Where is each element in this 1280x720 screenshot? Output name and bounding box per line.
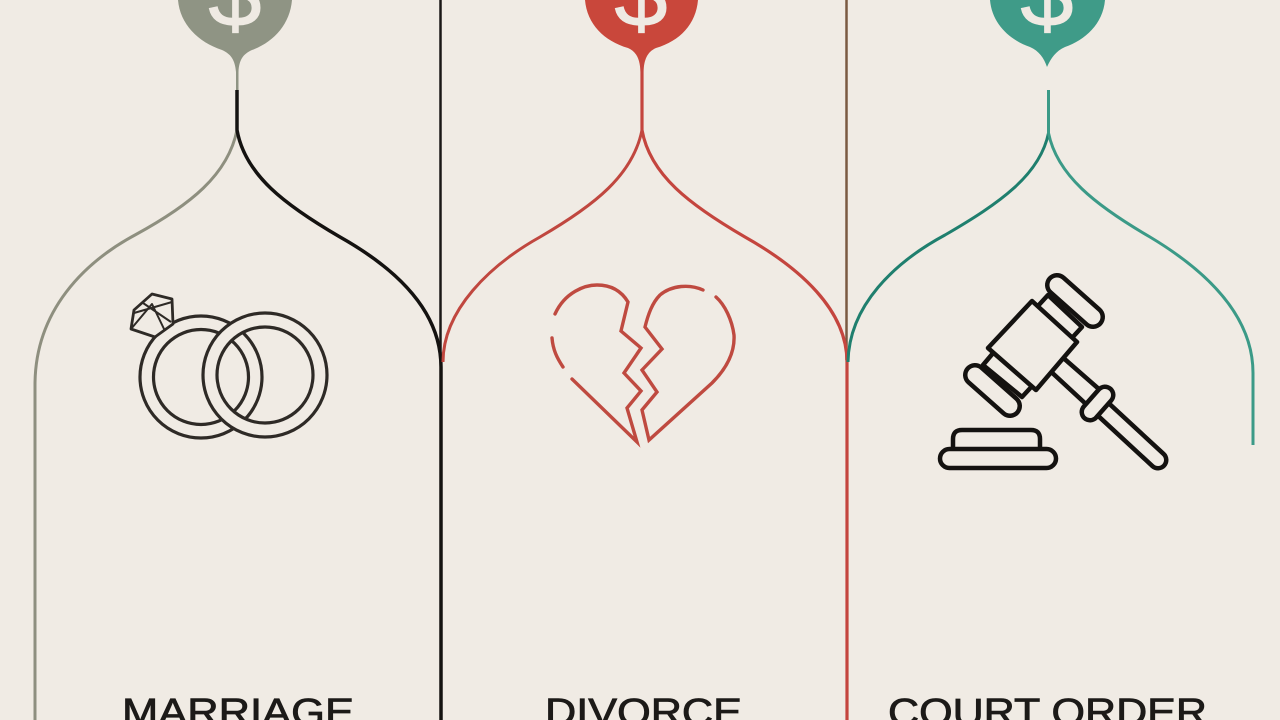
line: court order left branch bbox=[848, 90, 1048, 362]
sound block bbox=[940, 430, 1056, 468]
icon: wedding rings bbox=[131, 294, 327, 438]
drop pin: court order dollar bbox=[990, 0, 1105, 67]
column divider: black bbox=[439, 0, 442, 360]
gavel caps bbox=[975, 285, 1093, 406]
line: marriage right branch bbox=[237, 90, 441, 720]
line: court order right branch bbox=[1048, 90, 1253, 445]
line: divorce right branch bbox=[642, 60, 847, 720]
gavel collars bbox=[1037, 295, 1082, 339]
drop pin: divorce dollar bbox=[585, 0, 698, 90]
panel: marriage bbox=[35, 0, 441, 720]
gavel head bbox=[988, 301, 1077, 390]
panel: court order bbox=[848, 0, 1253, 720]
icon: gavel bbox=[940, 285, 1158, 468]
icon: broken heart bbox=[552, 285, 734, 442]
panel: divorce bbox=[443, 0, 847, 720]
line: marriage left branch bbox=[35, 110, 237, 720]
gavel handle bbox=[1047, 355, 1158, 460]
icon: diamond bbox=[131, 294, 173, 337]
drop pin: marriage dollar bbox=[178, 0, 292, 92]
column divider: brown bbox=[845, 0, 848, 360]
line: divorce left branch bbox=[443, 60, 642, 362]
